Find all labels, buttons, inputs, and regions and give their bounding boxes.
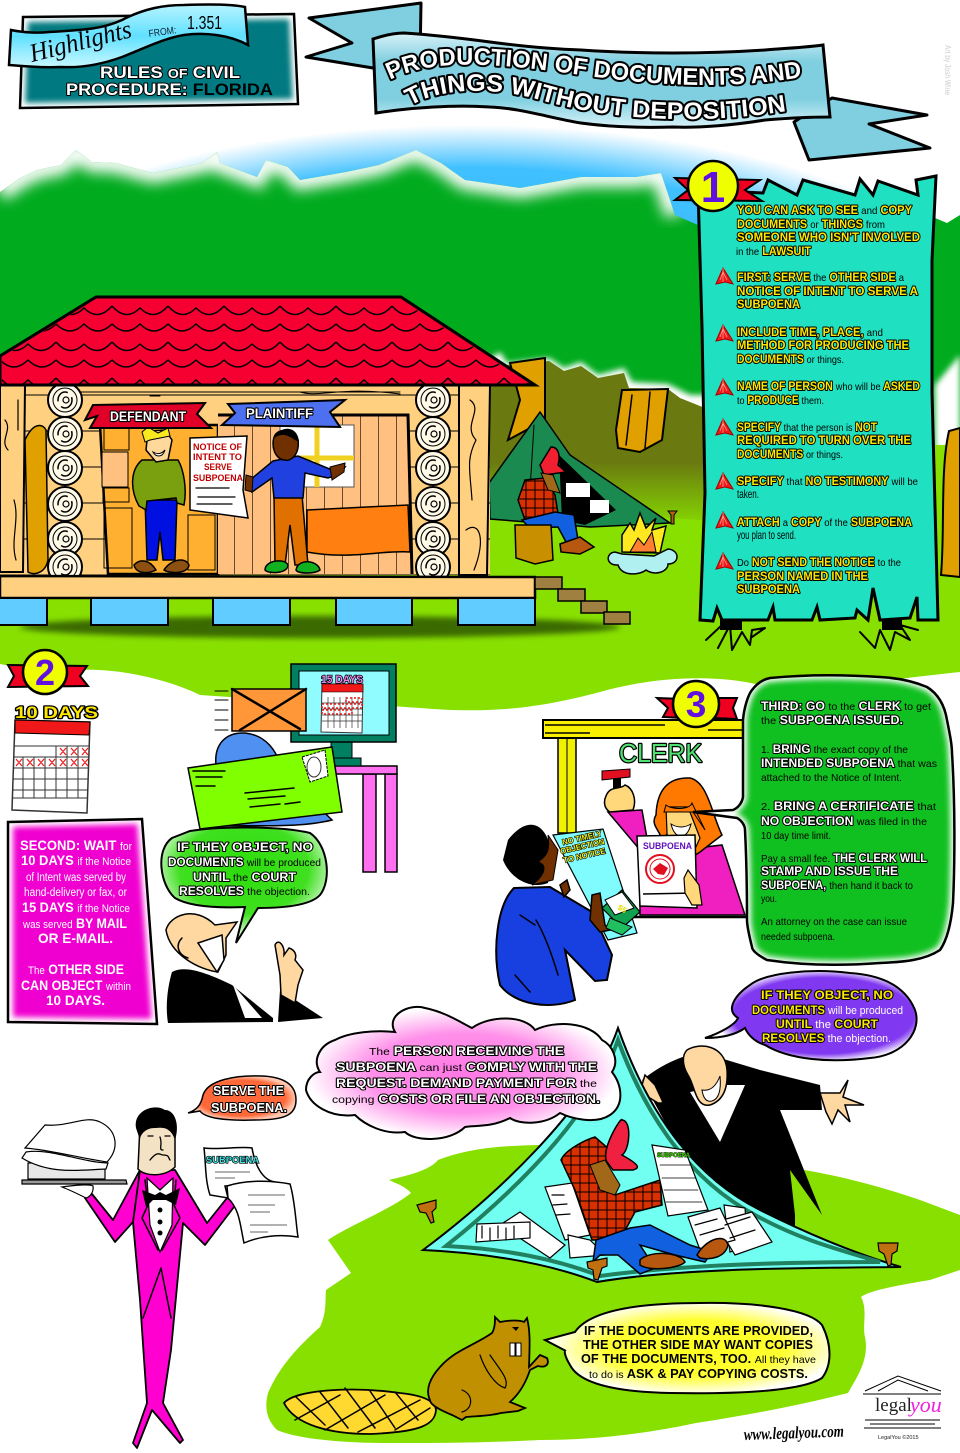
bullet: attach copy: ATTACH a COPY of the SUBPOENA [737, 515, 912, 529]
bullet: specify not required: REQUIRED TO TURN OVER THE [737, 433, 911, 447]
artist credit: Art by Josh Wine [943, 45, 952, 95]
panel 2: second step magenta box: 10 DAYS if the Notice [21, 852, 131, 868]
panel 3: third step green bubble: the SUBPOENA ISSUED. [761, 713, 903, 727]
cabin walls [0, 385, 490, 575]
cloud bubble: person receiving subpoena: SUBPOENA can just COMPLY WITH THE [336, 1060, 597, 1074]
bullet: include [716, 325, 909, 366]
bullet: do not send [716, 553, 901, 596]
cloud bubble: person receiving subpoena: The PERSON RECEIVING THE [369, 1044, 564, 1058]
bullet: include: METHOD FOR PRODUCING THE [737, 338, 909, 352]
subpoena paper [652, 1145, 708, 1216]
bullet: name of person: to PRODUCE them. [737, 393, 824, 407]
website url: www.legalyou.com [743, 1422, 844, 1444]
badge 1: 1 [701, 163, 725, 212]
panel 2: second step magenta box: CAN OBJECT within [21, 977, 131, 993]
panel 2: second step magenta box: OR E-MAIL. [38, 930, 113, 946]
bullet: first serve: FIRST: SERVE the OTHER SIDE a [737, 270, 904, 284]
subtitle [66, 63, 273, 99]
monitor [291, 664, 396, 766]
orange envelope [215, 689, 306, 731]
speech bubble: documents provided: to do is ASK & PAY COPYING COSTS. [589, 1367, 808, 1381]
bullet: attach copy: you plan to send. [737, 528, 796, 542]
defendant ribbon: DEFENDANT [110, 409, 187, 424]
steps [535, 577, 630, 624]
speech bubble: if they object (green): UNTIL the COURT [193, 870, 297, 884]
legalyou logo: LegalYou ©2015 [878, 1434, 919, 1441]
plaintiff figure [245, 429, 345, 573]
person back of chair [216, 733, 332, 826]
bullet: specify not required [716, 419, 911, 461]
title banner: PRODUCTION OF DOCUMENTS AND [382, 46, 802, 87]
waiter with tray [22, 1107, 298, 1448]
legalyou logo [863, 1376, 942, 1441]
highlights ribbon: 1.351 [187, 13, 222, 33]
shirt and bow tie [142, 1178, 180, 1318]
section 3 badge [657, 681, 737, 727]
calendar: 15 days: 15 DAYS [321, 674, 363, 686]
notice paper: SERVE [204, 462, 232, 473]
scenery: sky, mountains and ground [0, 125, 960, 710]
camping tent with lumberjack [489, 412, 677, 574]
cloud bubble: person receiving subpoena [306, 1007, 620, 1139]
lumberjack [515, 447, 594, 564]
speech bubble: documents provided: OF THE DOCUMENTS, TOO. All they have [581, 1352, 816, 1366]
bullet: no testimony [716, 473, 918, 501]
lumberjack [561, 1120, 728, 1274]
porch [0, 576, 535, 625]
tent [423, 1028, 901, 1282]
legalyou logo: you [908, 1392, 942, 1417]
cloud bubble: person receiving subpoena: copying COSTS OR FILE AN OBJECTION. [332, 1092, 600, 1106]
speech bubble: if they object (purple) [705, 971, 917, 1060]
speech bubble: if they object (purple): IF THEY OBJECT, NO [761, 988, 893, 1002]
bullet: include: DOCUMENTS or things. [737, 352, 844, 366]
subpoena document [204, 1147, 298, 1243]
defendant ribbon [85, 403, 211, 428]
bullet: no testimony: SPECIFY that NO TESTIMONY will be [737, 474, 918, 488]
panel 3: third step green bubble: Pay a small fee. THE CLERK WILL [761, 851, 927, 865]
title banner: THINGS WITHOUT DEPOSITION [400, 72, 787, 122]
lawyer in black, thumb up [166, 914, 323, 1023]
panel 3: third step green bubble: NO OBJECTION was filed in the [761, 814, 927, 828]
open tent with lumberjack reading [423, 1028, 901, 1282]
bullet: name of person [716, 379, 920, 407]
subpoena paper: SUBPOENA [657, 1153, 691, 1159]
pink table [333, 766, 397, 872]
notice paper: NOTICE OF [193, 442, 242, 453]
panel 3: third step green bubble: STAMP AND ISSUE THE [761, 864, 898, 878]
grass and trunks under scroll [706, 618, 918, 650]
bullet: include: INCLUDE TIME, PLACE, and [737, 325, 883, 339]
orange cloth [307, 505, 410, 555]
bullet: specify not required: DOCUMENTS or things. [737, 447, 843, 461]
icon: tent stake [668, 511, 677, 524]
calendar: 10 days [12, 703, 98, 813]
wood logs column left [48, 383, 82, 584]
trees behind tent [508, 358, 668, 452]
subtitle: PROCEDURE: FLORIDA [66, 80, 273, 99]
lawyer in black robe lifting tent [642, 1046, 864, 1250]
panel 2: second step magenta box: of Intent was served by [26, 872, 126, 884]
badge 1 [675, 161, 762, 212]
window frame [543, 720, 748, 917]
stack of papers on tray [22, 1120, 127, 1184]
bullet: do not send: Do NOT SEND THE NOTICE to the [737, 555, 901, 569]
panel 3: third step green bubble: needed subpoena. [761, 931, 835, 943]
intro text: YOU CAN ASK TO SEE and COPY [737, 203, 912, 217]
panel 2: second step magenta box: was served BY MAIL [22, 915, 127, 931]
panel 3: third step green bubble: INTENDED SUBPOENA that was [761, 756, 937, 770]
roof [0, 297, 535, 385]
notice paper [190, 436, 248, 518]
panel 2: second step magenta box: The OTHER SIDE [28, 961, 124, 977]
panel 3: third step green bubble: you. [761, 893, 777, 905]
panel 3: third step green bubble: attached to the Notice of Intent. [761, 772, 902, 784]
clerk woman [602, 769, 745, 915]
bullet: do not send: PERSON NAMED IN THE [737, 569, 868, 583]
icon: cash [602, 890, 640, 935]
subpoena document: SUBPOENA [206, 1155, 259, 1166]
beaver tail [284, 1388, 436, 1434]
scattered papers [476, 1183, 772, 1258]
panel 3: third step green bubble: An attorney on the case can issue [761, 916, 907, 928]
panel 3: third step green bubble: THIRD: GO to the CLERK to get [761, 699, 931, 713]
plaintiff ribbon: PLAINTIFF [246, 406, 313, 421]
waiter head [136, 1107, 177, 1175]
panel 2: second step magenta box: 15 DAYS if the Notice [22, 899, 130, 915]
icon: stamp in hand [602, 769, 635, 812]
speech bubble: if they object (purple): RESOLVES the objection. [762, 1031, 891, 1045]
subtitle: RULES OF CIVIL [100, 63, 240, 82]
bullet: first serve [716, 268, 918, 311]
subpoena document with seal: SUBPOENA [643, 841, 692, 851]
panel 2: second step magenta box: hand-delivery or fax, or [24, 887, 127, 899]
notice paper: SUBPOENA [193, 473, 243, 484]
panel 3: third step green bubble [693, 675, 954, 965]
bullet: do not send: SUBPOENA [737, 582, 800, 596]
highlights ribbon: Highlights [26, 15, 134, 68]
campfire [608, 513, 677, 574]
speech bubble: documents provided: IF THE DOCUMENTS ARE PROVIDED, [584, 1324, 813, 1338]
bullet: name of person: NAME OF PERSON who will be ASKED [737, 379, 920, 393]
section 2 badge: 2 [35, 652, 55, 693]
panel 3: third step green bubble: 10 day time limit. [761, 830, 831, 842]
scroll shape [698, 176, 938, 621]
bullet: no testimony: taken. [737, 487, 759, 501]
plaintiff ribbon [222, 400, 345, 427]
intro text [736, 203, 920, 258]
speech bubble: serve the subpoena: SUBPOENA. [211, 1100, 287, 1115]
defendant figure [133, 427, 189, 573]
title banner [304, 2, 932, 162]
tent stakes [417, 1200, 898, 1280]
speech bubble: if they object (green): RESOLVES the objection. [179, 884, 310, 898]
panel 3: third step green bubble: 2. BRING A CERTIFICATE that [761, 799, 936, 813]
interior wall with window [218, 415, 412, 574]
cyan paper [553, 829, 637, 940]
magenta tuxedo [85, 1170, 237, 1448]
speech bubble: documents provided [545, 1303, 830, 1393]
speech bubble: if they object (green): DOCUMENTS will be produced [168, 855, 321, 869]
highlights ribbon [9, 4, 248, 68]
speech bubble: if they object (purple): DOCUMENTS will be produced [752, 1003, 903, 1017]
bullet: attach copy [716, 512, 912, 542]
legalyou logo: legal [875, 1395, 912, 1416]
section 3 clerk window [496, 681, 748, 1005]
speech bubble: serve the subpoena: SERVE THE [213, 1083, 284, 1098]
subpoena document with seal [637, 835, 702, 908]
intro text: in the LAWSUIT [736, 244, 812, 258]
panel 2: second step magenta box: SECOND: WAIT for [20, 837, 132, 853]
speech bubble: if they object (green) [161, 827, 327, 943]
highlights ribbon: FROM: [148, 25, 177, 40]
cyan paper: NO TIMELY [561, 829, 603, 847]
cloud bubble: person receiving subpoena: REQUEST. DEMAND PAYMENT FOR the [336, 1076, 597, 1090]
notice paper: INTENT TO [193, 452, 242, 463]
green envelope [188, 747, 342, 829]
hand glove [62, 1185, 93, 1198]
wood logs column right [416, 383, 450, 584]
speech bubble: serve the subpoena [188, 1076, 296, 1120]
log cabin [0, 297, 630, 625]
bullet: specify not required: SPECIFY that the person is NOT [737, 420, 878, 434]
intro text: DOCUMENTS or THINGS from [737, 217, 885, 231]
intro text: SOMEONE WHO ISN'T INVOLVED [737, 230, 920, 244]
speech bubble: documents provided: THE OTHER SIDE MAY WANT COPIES [583, 1338, 813, 1352]
section 2 badge [8, 650, 88, 694]
speech bubble: if they object (purple): UNTIL the COURT [776, 1017, 879, 1031]
door [100, 425, 218, 574]
header panel: Rules of Civil Procedure [9, 4, 298, 108]
ground right-hand trunk [941, 428, 960, 577]
panel 3: third step green bubble: 1. BRING the exact copy of the [761, 742, 908, 756]
panel 1: subpoena steps scroll [675, 161, 938, 650]
speech bubble: if they object (green): IF THEY OBJECT, NO [177, 840, 313, 854]
icon: cash: $5 [616, 903, 629, 915]
cyan paper: OBJECTION [559, 837, 606, 856]
panel 3: third step green bubble: SUBPOENA, then hand it back to [761, 878, 913, 892]
clerk sign: CLERK [619, 738, 703, 768]
lower lime ground [266, 1145, 960, 1443]
calendar: 10 days: 10 DAYS [15, 703, 98, 722]
tent [489, 412, 670, 527]
man from behind [496, 825, 640, 1005]
beaver body [428, 1317, 548, 1420]
panel 2: second step magenta box [8, 819, 157, 1024]
bullet: first serve: NOTICE OF INTENT TO SERVE A [737, 284, 918, 298]
panel 2: second step magenta box: 10 DAYS. [46, 992, 105, 1008]
desk scene with monitor and envelopes [188, 664, 397, 872]
beaver [284, 1317, 548, 1434]
bullet: first serve: SUBPOENA [737, 297, 800, 311]
cyan paper: TO NOTICE [562, 846, 607, 865]
section 3 badge: 3 [686, 684, 706, 725]
